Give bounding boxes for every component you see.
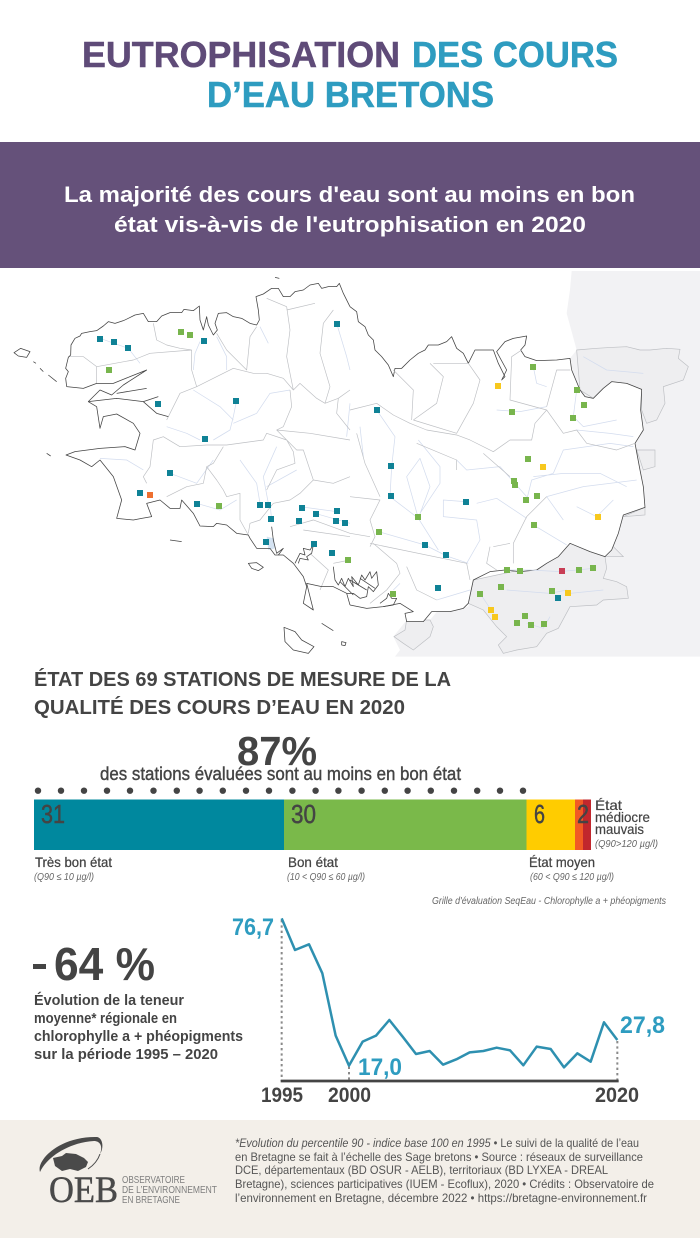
station markers: very good (teal) xyxy=(97,321,561,601)
stacked bar chart: 31 xyxy=(41,799,65,829)
legend: average status xyxy=(529,854,614,883)
panel: footer xyxy=(0,1120,700,1238)
line chart: chlorophyll trend: 1995 xyxy=(261,1084,303,1107)
key figure: 87%: des stations évaluées sont au moins en bon état xyxy=(100,763,461,784)
stacked bar chart: 6 xyxy=(534,799,545,829)
text block: sources and credits xyxy=(235,1136,654,1205)
legend: good status: Bon état xyxy=(288,854,338,870)
stacked bar chart: 30 xyxy=(291,799,316,829)
text block: sources and credits: l’environnement en Bretagne, décembre 2022 • https://bretagne-environnement.fr xyxy=(235,1191,647,1205)
line chart: chlorophyll trend: 76,7 xyxy=(232,914,274,941)
line chart: chlorophyll trend: 2000 xyxy=(328,1084,371,1107)
text block: sources and credits: *Evolution du percentile 90 - indice base 100 en 1995 • Le suivi de la qualité de l’eau xyxy=(235,1136,639,1150)
heading: station status: ÉTAT DES 69 STATIONS DE MESURE DE LA xyxy=(34,668,451,691)
map: stations in Brittany xyxy=(14,271,700,657)
line chart: chlorophyll trend: 2020 xyxy=(595,1084,639,1107)
text block: evolution description: Évolution de la teneur xyxy=(34,992,184,1009)
legend: very good status xyxy=(34,854,112,883)
legend: good status xyxy=(287,854,365,883)
logo: OEB: DE L’ENVIRONNEMENT xyxy=(122,1184,217,1196)
logo: OEB: OEB xyxy=(49,1170,118,1211)
line chart: chlorophyll trend xyxy=(232,914,665,1107)
text block: evolution description xyxy=(34,992,243,1063)
text block: evolution description: chlorophylle a + phéopigments xyxy=(34,1028,243,1045)
legend: good status: (10 < Q90 ≤ 60 µg/l) xyxy=(287,872,365,883)
station markers: poor (orange and red) xyxy=(147,492,153,498)
dotted bracket above bar xyxy=(35,788,526,794)
legend: poor and bad status: médiocre xyxy=(595,809,650,825)
stacked bar chart: 2 xyxy=(577,799,589,829)
logo: OEB: OBSERVATOIRE xyxy=(122,1174,185,1186)
legend: average status: (60 < Q90 ≤ 120 µg/l) xyxy=(530,872,614,883)
logo: OEB: EN BRETAGNE xyxy=(122,1194,180,1206)
title: D’EAU BRETONS xyxy=(207,74,494,115)
text block: sources and credits: en Bretagne se fait à l’échelle des Sage bretons • Source : réseaux de surveillance xyxy=(235,1150,643,1164)
line chart: chlorophyll trend: 17,0 xyxy=(358,1054,402,1081)
legend: very good status: (Q90 ≤ 10 µg/l) xyxy=(34,872,94,883)
text block: sources and credits: DCE, départementaux (BD OSUR - AELB), territoriaux (BD LYXEA - DREAL xyxy=(235,1163,608,1177)
text block: sources and credits: Bretagne), sciences participatives (IUEM - Ecoflux), 2020 • Crédits : Observatoire de xyxy=(235,1177,654,1191)
logo: OEB xyxy=(40,1137,217,1211)
legend: very good status: Très bon état xyxy=(35,854,112,870)
legend: poor and bad status: État xyxy=(595,797,622,813)
title xyxy=(82,34,618,115)
key figure: 87% xyxy=(100,728,461,784)
heading: station status xyxy=(34,668,451,719)
panel: purple subtitle banner xyxy=(0,142,700,268)
legend: poor and bad status: mauvais xyxy=(595,821,644,837)
stacked bar chart xyxy=(34,799,591,850)
evaluation grid note: Grille d'évaluation SeqEau - Chlorophylle a + phéopigments xyxy=(432,896,666,907)
legend: poor and bad status: (Q90>120 µg/l) xyxy=(595,839,658,850)
panel: purple subtitle banner: état vis-à-vis de l'eutrophisation en 2020 xyxy=(114,212,586,237)
legend: average status: État moyen xyxy=(529,854,595,870)
station markers: average (yellow) xyxy=(488,383,601,620)
title: EUTROPHISATION xyxy=(82,34,400,75)
key figure: 87%: 87% xyxy=(237,728,317,774)
text block: evolution description: moyenne* régionale en xyxy=(34,1010,177,1027)
key figure: -64 %: 64 % xyxy=(54,938,155,990)
text block: evolution description: sur la période 1995 – 2020 xyxy=(34,1046,218,1063)
station markers: good (green) xyxy=(106,329,596,628)
line chart: chlorophyll trend: 27,8 xyxy=(620,1012,665,1039)
legend: poor and bad status xyxy=(595,797,658,850)
title: DES COURS xyxy=(412,34,618,75)
heading: station status: QUALITÉ DES COURS D’EAU EN 2020 xyxy=(34,696,405,719)
panel: purple subtitle banner: La majorité des cours d'eau sont au moins en bon xyxy=(64,182,635,207)
